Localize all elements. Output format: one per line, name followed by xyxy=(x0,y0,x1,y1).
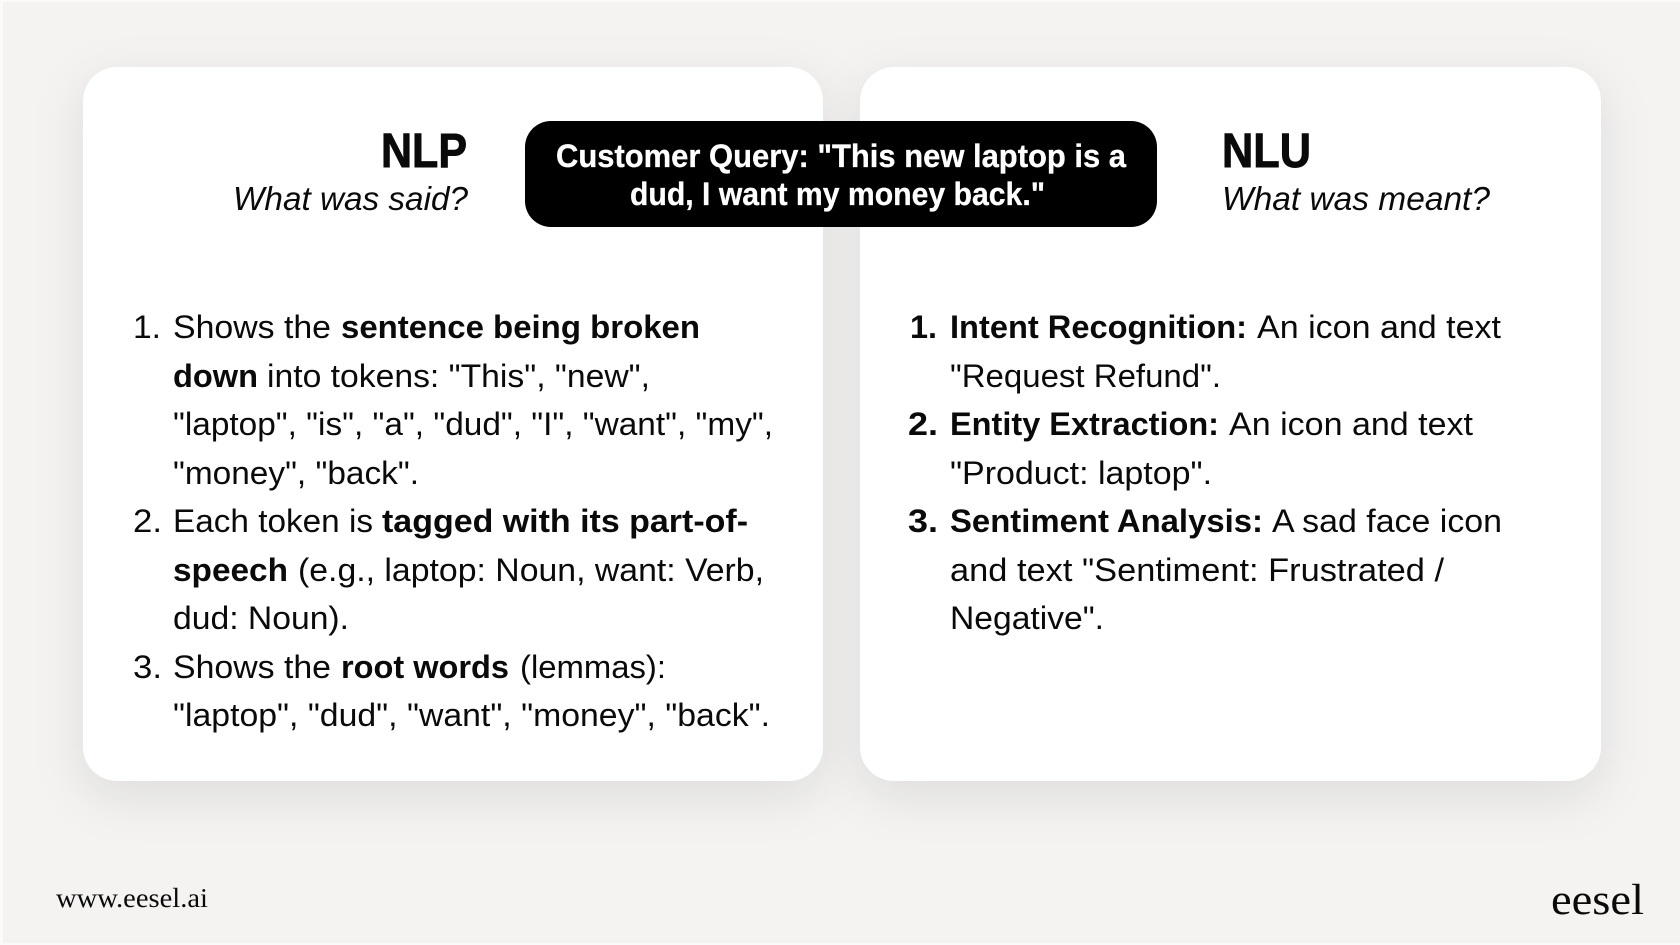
list: NLP steps: Shows the xyxy=(173,649,331,685)
list: NLP steps: into tokens: "This", "new", xyxy=(267,358,650,394)
footer: website url: www.eesel.ai xyxy=(56,883,208,913)
list: NLU steps: "Request Refund". xyxy=(950,358,1221,394)
list: NLP steps: "laptop", "dud", "want", "money", "back". xyxy=(173,697,770,733)
list: NLU steps: 3. xyxy=(908,503,938,539)
list: NLU steps: "Product: laptop". xyxy=(950,455,1212,491)
list: NLP steps: tagged with its part-of- xyxy=(382,503,748,539)
subheading: What was said?: What was said? xyxy=(233,180,469,217)
logo: eesel wordmark: eesel xyxy=(1551,877,1644,924)
list: NLU steps: Entity Extraction: xyxy=(950,406,1219,442)
list: NLP steps: Each token is xyxy=(173,503,373,539)
list: NLP steps xyxy=(133,309,773,733)
list: NLP steps: (lemmas): xyxy=(520,649,666,685)
list: NLU steps: 1. xyxy=(910,309,937,345)
panel: NLP xyxy=(83,67,823,781)
callout: customer query xyxy=(525,121,1157,227)
list: NLU steps: A sad face icon xyxy=(1272,503,1502,539)
list: NLP steps: Shows the xyxy=(173,309,331,345)
list: NLU steps xyxy=(908,309,1502,636)
callout: customer query: Customer Query: "This new laptop is a xyxy=(556,138,1126,174)
list: NLU steps: An icon and text xyxy=(1257,309,1501,345)
list: NLU steps: 2. xyxy=(908,406,938,442)
heading: NLP: NLP xyxy=(381,125,467,178)
list: NLP steps: root words xyxy=(341,649,509,685)
list: NLP steps: "laptop", "is", "a", "dud", "I", "want", "my", xyxy=(173,406,773,442)
list: NLP steps: 2. xyxy=(133,503,162,539)
subheading: What was meant?: What was meant? xyxy=(1222,180,1491,217)
list: NLP steps: "money", "back". xyxy=(173,455,419,491)
list: NLP steps: 1. xyxy=(133,309,161,345)
heading: NLU: NLU xyxy=(1222,125,1311,178)
panel: NLU xyxy=(860,67,1601,781)
list: NLP steps: dud: Noun). xyxy=(173,600,349,636)
list: NLP steps: 3. xyxy=(133,649,162,685)
list: NLU steps: An icon and text xyxy=(1229,406,1473,442)
list: NLU steps: and text "Sentiment: Frustrated / xyxy=(950,552,1444,588)
list: NLU steps: Intent Recognition: xyxy=(950,309,1247,345)
list: NLP steps: sentence being broken xyxy=(341,309,700,345)
list: NLP steps: speech xyxy=(173,552,288,588)
callout: customer query: dud, I want my money back." xyxy=(630,176,1045,212)
list: NLU steps: Sentiment Analysis: xyxy=(950,503,1263,539)
list: NLU steps: Negative". xyxy=(950,600,1104,636)
list: NLP steps: (e.g., laptop: Noun, want: Verb, xyxy=(298,552,764,588)
list: NLP steps: down xyxy=(173,358,258,394)
